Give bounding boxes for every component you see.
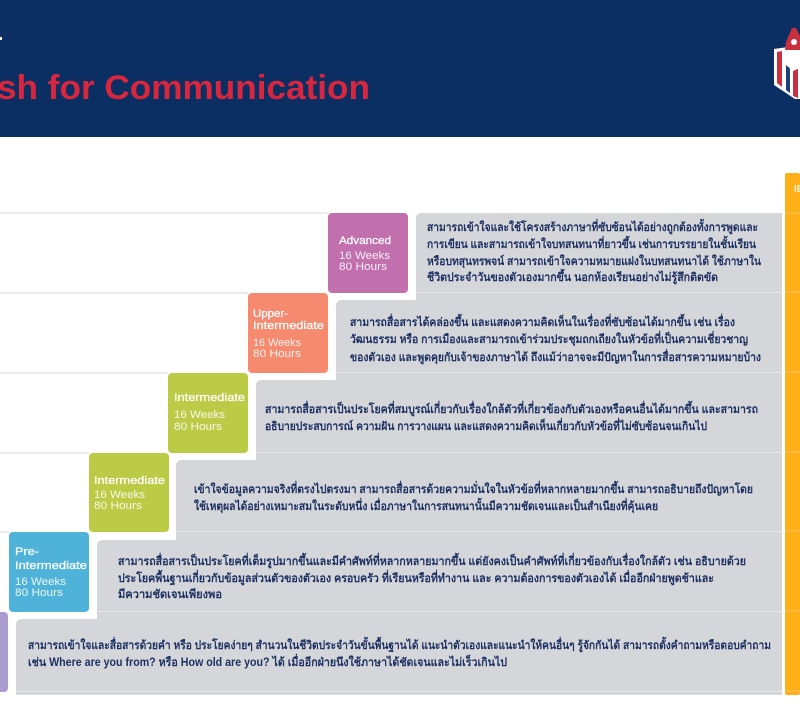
level box: upper-intermediate: 16 Weeks	[253, 337, 301, 349]
icon: crest logo	[774, 28, 800, 99]
level box: pre-intermediate: 80 Hours	[15, 587, 64, 599]
level box: intermediate: 16 Weeks	[174, 409, 226, 421]
panel: upper-intermediate description: ของตัวเอง และพูดคุยกับเจ้าของภาษาได้ ถึงแม้ว่าอาจจะมีปัญหาในการสื่อสารความหมายบ้าง	[350, 348, 761, 365]
panel: advanced description: การเขียน และสามารถเข้าใจบทสนทนาที่ยาวขึ้น เช่นการบรรยายในชั้นเรียน	[427, 235, 756, 251]
level box: intermediate: 80 Hours	[174, 421, 223, 433]
panel: intermediate description	[256, 372, 782, 452]
level box: intermediate: Intermediate	[174, 392, 245, 404]
level box: intermediate lower: 80 Hours	[94, 500, 143, 512]
header banner	[0, 0, 800, 137]
panel: pre-intermediate description: ประโยคพื้นฐานเกี่ยวกับข้อมูลส่วนตัวของตัวเอง ครอบครัว ที่เรียนหรือที่ทำงาน และ ความต้องการของตัวเองได้ เมื่ออีกฝ่ายพูดช้าและ	[118, 569, 714, 586]
panel: pre-intermediate plus description	[176, 452, 782, 531]
level box: intermediate lower	[89, 453, 169, 532]
panel: advanced description	[416, 213, 782, 292]
level box: upper-intermediate: 80 Hours	[253, 348, 302, 360]
panel: upper-intermediate description: สามารถสื่อสารได้คล่องขึ้น และแสดงความคิดเห็นในเรื่องที่ซับซ้อนได้มากขึ้น เช่น เรื่อง	[350, 313, 735, 329]
level box: advanced: 80 Hours	[339, 261, 388, 273]
panel: beginner description: เช่น Where are you from? หรือ How old are you? ได้ เมื่ออีกฝ่ายนึงใช้ภาษาได้ชัดเจนและไม่เร็วเกินไป	[28, 653, 507, 669]
level box: intermediate lower: 16 Weeks	[94, 489, 146, 501]
level box: upper-intermediate: Intermediate	[253, 320, 324, 332]
panel: advanced description: หรือบทสุนทรพจน์ สามารถเข้าใจความหมายแฝงในบทสนทนาได้ ใช้ภาษาใน	[427, 254, 761, 269]
panel: orange score column	[785, 173, 800, 695]
level box: advanced	[328, 213, 408, 293]
panel: pre-intermediate description: สามารถสื่อสารเป็นประโยคที่เต็มรูปมากขึ้นและมีคำศัพท์ที่หลากหลายมากขึ้น แต่ยังคงเป็นคำศัพท์ที่เกี่ยวข้องกับเรื่องใกล้ตัว เช่น อธิบายด้วย	[118, 552, 746, 569]
level box: advanced: Advanced	[339, 235, 391, 247]
panel: advanced description: สามารถเข้าใจและใช้โครงสร้างภาษาที่ซับซ้อนได้อย่างถูกต้องทั้งการพูดและ	[427, 218, 758, 235]
panel: advanced description: ชีวิตประจำวันของตัวเองมากขึ้น นอกห้องเรียนอย่างไม่รู้สึกติดขัด	[427, 268, 718, 285]
panel: pre-intermediate plus description: เข้าใจข้อมูลความจริงที่ตรงไปตรงมา สามารถสื่อสารด้วยความมั่นใจในหัวข้อที่หลากหลายมากขึ้น สามารถอธิบายถึงปัญหาโดย	[194, 480, 753, 497]
panel: upper-intermediate description	[336, 292, 782, 372]
panel: intermediate description: สามารถสื่อสารเป็นประโยคที่สมบูรณ์เกี่ยวกับเรื่องใกล้ตัวที่เกี่ยวข้องกับตัวเองหรือคนอื่นได้มากขึ้น และสามารถ	[265, 400, 758, 417]
level box: intermediate lower: Intermediate	[94, 475, 165, 487]
panel: pre-intermediate description	[97, 531, 782, 611]
level box: upper-intermediate	[248, 293, 328, 373]
panel: upper-intermediate description: วัฒนธรรม หรือ การเมืองและสามารถเข้าร่วมประชุมถกเถียงในหัวข้อที่เป็นความเชี่ยวชาญ	[350, 330, 748, 347]
level box: beginner	[0, 612, 8, 692]
level box: advanced: 16 Weeks	[339, 250, 391, 262]
level box: pre-intermediate: Pre-	[15, 546, 39, 558]
faint step lines	[0, 213, 328, 532]
level box: intermediate	[168, 373, 248, 453]
panel: intermediate description: อธิบายประสบการณ์ ความฝัน การวางแผน และแสดงความคิดเห็นเกี่ยวกับหัวข้อที่ไม่ซับซ้อนจนเกินไป	[265, 417, 707, 433]
panel: pre-intermediate description: มีความชัดเจนเพียงพอ	[118, 588, 222, 601]
level box: pre-intermediate: 16 Weeks	[15, 576, 67, 588]
title: sh for Communication	[0, 69, 370, 107]
level box: pre-intermediate: Intermediate	[15, 560, 87, 572]
panel: beginner description	[16, 611, 782, 695]
level box: upper-intermediate: Upper-	[253, 308, 288, 320]
panel: pre-intermediate plus description: ใช้เหตุผลได้อย่างเหมาะสมในระดับหนึ่ง เมื่อภาษาในการสนทนานั้นมีความชัดเจนและเป็นสำเนียงที่คุ้นเคย	[194, 497, 658, 514]
level box: pre-intermediate	[9, 532, 89, 612]
